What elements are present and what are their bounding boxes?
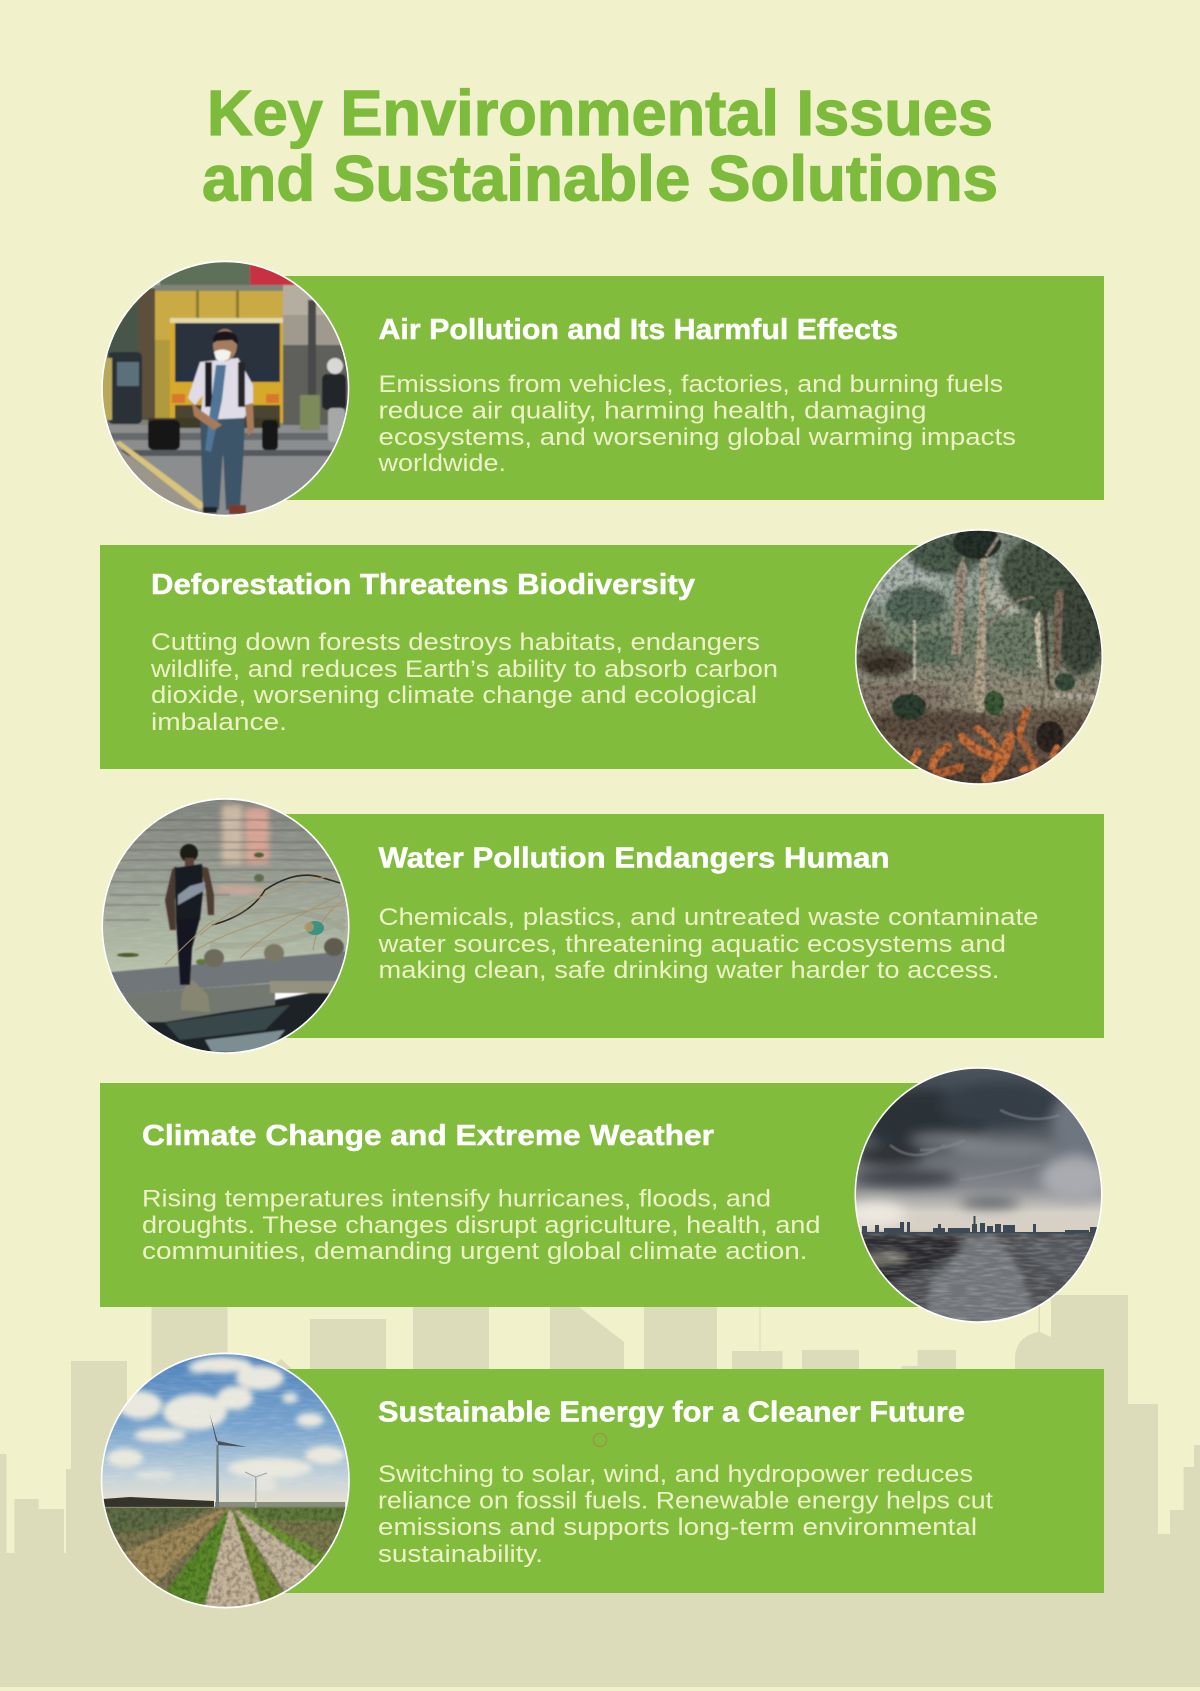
panel background <box>225 814 1104 1038</box>
body text: making clean, safe drinking water harder to access. <box>378 957 1000 984</box>
photo: fisherman casting a net into polluted water <box>100 797 355 1060</box>
body text: ecosystems, and worsening global warming impacts <box>378 424 1016 451</box>
body text: droughts. These changes disrupt agriculture, health, and <box>142 1212 820 1239</box>
photo: masked student crossing street in front of truck <box>100 258 353 520</box>
body text: water sources, threatening aquatic ecosystems and <box>377 931 1006 958</box>
ledge front face <box>122 983 275 1022</box>
heading: Water Pollution Endangers Human <box>378 842 890 874</box>
cut orange roots <box>912 710 1057 778</box>
fields <box>98 1507 354 1612</box>
photo: wind turbines above farm track <box>98 1350 354 1612</box>
panel: deforestation <box>100 525 1110 790</box>
small circle marker <box>594 1434 606 1446</box>
distant skyline <box>850 1216 1110 1234</box>
fisherman silhouette <box>165 844 214 985</box>
body text: dioxide, worsening climate change and ecological <box>151 682 757 709</box>
body text: reduce air quality, harming health, damaging <box>378 398 926 424</box>
title <box>202 77 998 214</box>
body text: emissions and supports long-term environmental <box>378 1514 977 1541</box>
panel background <box>225 1369 1104 1593</box>
body text: communities, demanding urgent global climate action. <box>142 1238 808 1265</box>
panel: air pollution <box>100 258 1104 520</box>
city skyline silhouette <box>0 1295 1200 1687</box>
student <box>188 329 254 514</box>
body text: Switching to solar, wind, and hydropower reduces <box>378 1461 973 1488</box>
body text: Emissions from vehicles, factories, and burning fuels <box>378 371 1003 398</box>
title: Key Environmental Issues <box>207 77 993 149</box>
panel: sustainable energy <box>98 1350 1104 1612</box>
body text <box>378 1461 993 1568</box>
body text: Cutting down forests destroys habitats, endangers <box>151 629 760 656</box>
body text <box>142 1186 820 1265</box>
heading: Deforestation Threatens Biodiversity <box>151 569 695 601</box>
panel: water pollution <box>100 797 1104 1060</box>
heading: Air Pollution and Its Harmful Effects <box>378 314 898 346</box>
motorbike rider <box>300 358 346 442</box>
ledge top <box>100 951 350 994</box>
body text: reliance on fossil fuels. Renewable energy helps cut <box>378 1488 993 1514</box>
panel: climate change <box>100 1065 1110 1327</box>
body text: imbalance. <box>151 709 287 736</box>
body text <box>377 904 1038 984</box>
tree trunks <box>973 556 987 712</box>
heading: Sustainable Energy for a Cleaner Future <box>378 1396 965 1428</box>
truck <box>138 285 283 450</box>
left car <box>102 352 142 424</box>
cast net <box>165 875 345 965</box>
panel background <box>225 276 1104 500</box>
body text: Rising temperatures intensify hurricanes, floods, and <box>142 1186 771 1212</box>
panel background <box>100 545 980 769</box>
dark water below <box>126 992 330 1052</box>
body text: Chemicals, plastics, and untreated waste contaminate <box>378 904 1038 931</box>
body text: sustainability. <box>378 1541 543 1568</box>
wind turbines <box>198 1413 267 1508</box>
panel background <box>100 1083 980 1307</box>
tree line <box>103 1497 345 1508</box>
body text: wildlife, and reduces Earth’s ability to absorb carbon <box>150 656 778 683</box>
body text: worldwide. <box>377 450 506 477</box>
body text <box>377 371 1016 477</box>
title: and Sustainable Solutions <box>202 142 998 214</box>
photo: storm clouds over a city skyline and sea <box>845 1065 1110 1327</box>
body text <box>150 629 778 736</box>
photo: cleared forest with cut roots <box>850 525 1110 790</box>
heading: Climate Change and Extreme Weather <box>142 1120 714 1152</box>
